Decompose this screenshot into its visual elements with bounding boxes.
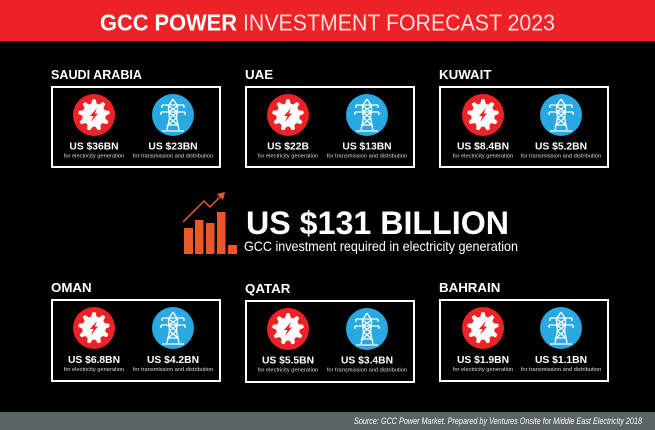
title band bbox=[0, 0, 655, 41]
panel: Kuwait: US $8.4BN bbox=[457, 142, 509, 152]
panel: Kuwait: for transmission and distribution bbox=[521, 154, 601, 160]
panel: Bahrain: for transmission and distribution bbox=[521, 367, 601, 373]
title band: INVESTMENT FORECAST 2023 bbox=[243, 10, 555, 36]
panel: Oman: US $6.8BN bbox=[68, 355, 120, 366]
panel: Oman: for transmission and distribution bbox=[133, 367, 213, 373]
bar chart icon with rising arrow bbox=[183, 192, 237, 254]
panel: UAE: for electricity generation bbox=[258, 154, 318, 160]
panel: Qatar: US $3.4BN bbox=[341, 356, 393, 366]
panel: UAE bbox=[245, 67, 414, 167]
panel: Qatar: US $5.5BN bbox=[262, 356, 314, 366]
panel: Bahrain: US $1.9BN bbox=[457, 355, 509, 366]
panel: Saudi Arabia: US $36BN bbox=[69, 142, 119, 152]
panel: UAE: US $13BN bbox=[342, 142, 392, 152]
title band: GCC POWER bbox=[100, 10, 237, 36]
panel: Kuwait bbox=[439, 67, 608, 167]
panel: Bahrain: BAHRAIN bbox=[439, 280, 500, 295]
panel: Qatar bbox=[245, 281, 414, 382]
panel: Qatar: for transmission and distribution bbox=[327, 368, 407, 374]
panel: Oman bbox=[51, 280, 220, 381]
panel: Qatar: for electricity generation bbox=[258, 368, 318, 374]
panel: Bahrain: for electricity generation bbox=[453, 367, 513, 373]
panel: Bahrain bbox=[439, 280, 608, 381]
panel: Qatar: QATAR bbox=[245, 281, 291, 296]
panel: Kuwait: for electricity generation bbox=[453, 154, 513, 160]
headline subtitle: GCC investment required in electricity generation bbox=[244, 238, 518, 254]
panel: Saudi Arabia: for electricity generation bbox=[64, 154, 124, 160]
panel: Saudi Arabia: for transmission and distribution bbox=[133, 154, 213, 160]
panel: Oman: US $4.2BN bbox=[147, 355, 199, 366]
panel: Saudi Arabia bbox=[51, 67, 220, 167]
panel: UAE: UAE bbox=[245, 67, 273, 82]
panel: Kuwait: US $5.2BN bbox=[535, 142, 587, 152]
panel: Oman: for electricity generation bbox=[64, 367, 124, 373]
panel: UAE: for transmission and distribution bbox=[327, 154, 407, 160]
panel: Oman: OMAN bbox=[51, 280, 92, 295]
panel: Bahrain: US $1.1BN bbox=[535, 355, 587, 366]
headline total: US $131 BILLION bbox=[246, 205, 509, 241]
panel: Kuwait: KUWAIT bbox=[439, 67, 491, 82]
source footer bbox=[0, 412, 655, 430]
panel: Saudi Arabia: US $23BN bbox=[148, 142, 198, 152]
panel: UAE: US $22B bbox=[267, 142, 309, 152]
panel: Saudi Arabia: SAUDI ARABIA bbox=[51, 67, 142, 82]
